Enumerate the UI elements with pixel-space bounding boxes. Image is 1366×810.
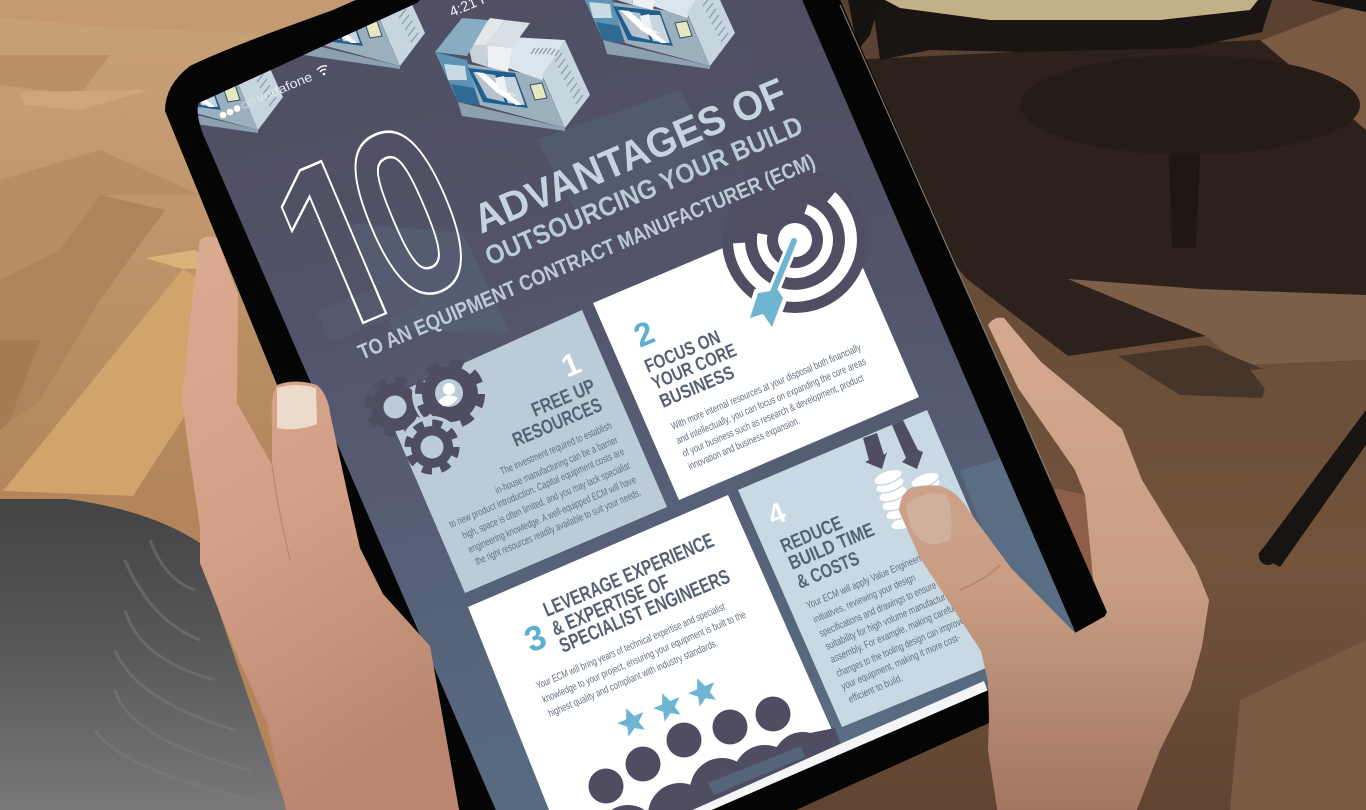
background: chair shadow and floor light xyxy=(850,0,1366,810)
heading xyxy=(540,529,733,658)
body text: highest quality and compliant with industry standards. xyxy=(546,637,720,720)
heading: BUILD TIME xyxy=(785,519,878,575)
chair xyxy=(848,0,1366,567)
body text: With more internal resources at your disposal both financially xyxy=(669,341,863,433)
body text: high, space is often limited, and you may lack specialist xyxy=(460,460,632,542)
body text: Your ECM will bring years of technical expertise and specialist xyxy=(534,601,727,692)
big numeral 10: 1 xyxy=(240,100,437,386)
panel 2: focus on your core business xyxy=(593,167,919,500)
screen right background xyxy=(750,0,1090,810)
body text: in-house manufacturing can be a barrier xyxy=(493,434,620,497)
icon: target and arrow xyxy=(722,192,862,327)
tablet body xyxy=(165,0,1107,810)
heading: FOCUS ON xyxy=(642,327,724,378)
body text: engineering knowledge. A well-equipped ECM will have xyxy=(466,474,638,556)
body text: Your ECM will apply Value Engineering xyxy=(804,549,931,612)
body text: The investment required to establish xyxy=(498,420,614,478)
wood planks left xyxy=(0,0,366,496)
screen xyxy=(128,0,1090,810)
title: ADVANTAGES OF xyxy=(467,69,793,242)
icon: audience xyxy=(588,696,842,810)
background facets xyxy=(350,90,1076,634)
heading: SPECIALIST ENGINEERS xyxy=(556,565,733,658)
body text: initiatives, reviewing your design xyxy=(811,572,918,626)
heading: YOUR CORE xyxy=(649,340,740,395)
body text: knowledge to your project, ensuring your equipment is built to the xyxy=(540,609,748,706)
panel 3: leverage experience xyxy=(468,495,842,810)
tablet edge highlight xyxy=(840,5,1051,481)
right hand and thumb xyxy=(899,485,1209,810)
body text: of your business such as research & development, product xyxy=(680,372,866,460)
body text: assembly. For example, making careful xyxy=(828,602,957,666)
left hand xyxy=(182,236,460,810)
big numeral 10 xyxy=(280,130,462,324)
icon: gears xyxy=(368,356,488,478)
number 3: 3 xyxy=(519,617,552,660)
heading: LEVERAGE EXPERIENCE xyxy=(540,529,717,622)
body text: specifications and drawings to ensure xyxy=(817,579,938,640)
heading: BUSINESS xyxy=(657,362,738,413)
heading xyxy=(512,380,602,446)
body text: to new product introduction. Capital equipment costs are xyxy=(447,446,626,531)
heading: REDUCE xyxy=(777,512,846,558)
big numeral 10: 0 xyxy=(313,70,504,354)
status bar xyxy=(220,0,503,118)
body text: your equipment, making it more cost- xyxy=(839,632,962,693)
heading: & COSTS xyxy=(793,548,863,594)
machines row xyxy=(198,0,735,133)
body text: suitability for high volume manufacture xyxy=(823,589,952,653)
heading xyxy=(644,330,738,408)
number 4: 4 xyxy=(763,497,791,532)
body text xyxy=(669,341,868,473)
panel 4: reduce build time and costs xyxy=(738,410,985,727)
number 2: 2 xyxy=(628,313,660,354)
stool xyxy=(0,499,300,810)
icon: coin stacks xyxy=(874,470,940,530)
body text: the right resources readily available to suit your needs. xyxy=(473,487,643,568)
body text: efficient to build. xyxy=(846,672,905,706)
status bar: vodafone xyxy=(254,69,314,106)
number 1: 1 xyxy=(556,345,586,384)
background: wood floor right xyxy=(700,0,1366,810)
bottom strip xyxy=(688,681,989,810)
heading: & EXPERTISE OF xyxy=(548,570,673,641)
icon: three stars xyxy=(617,678,716,736)
heading: RESOURCES xyxy=(509,394,605,452)
body text: and intellectually, you can focus on expanding the core areas xyxy=(674,356,868,447)
body text xyxy=(804,549,966,706)
icon: down arrows xyxy=(863,420,923,469)
title: TO AN EQUIPMENT CONTRACT MANUFACTURER (ECM) xyxy=(355,149,819,365)
body text xyxy=(447,420,643,568)
body text: changes to the tooling design can improve xyxy=(834,615,966,680)
title: OUTSOURCING YOUR BUILD xyxy=(481,110,807,272)
body text: innovation and business expansion. xyxy=(686,415,802,473)
heading xyxy=(780,516,876,588)
back fingers of right hand xyxy=(988,318,1209,690)
background: wooden floor left xyxy=(0,0,700,810)
panel 1: free up resources xyxy=(368,310,667,593)
heading: FREE UP xyxy=(528,375,599,422)
